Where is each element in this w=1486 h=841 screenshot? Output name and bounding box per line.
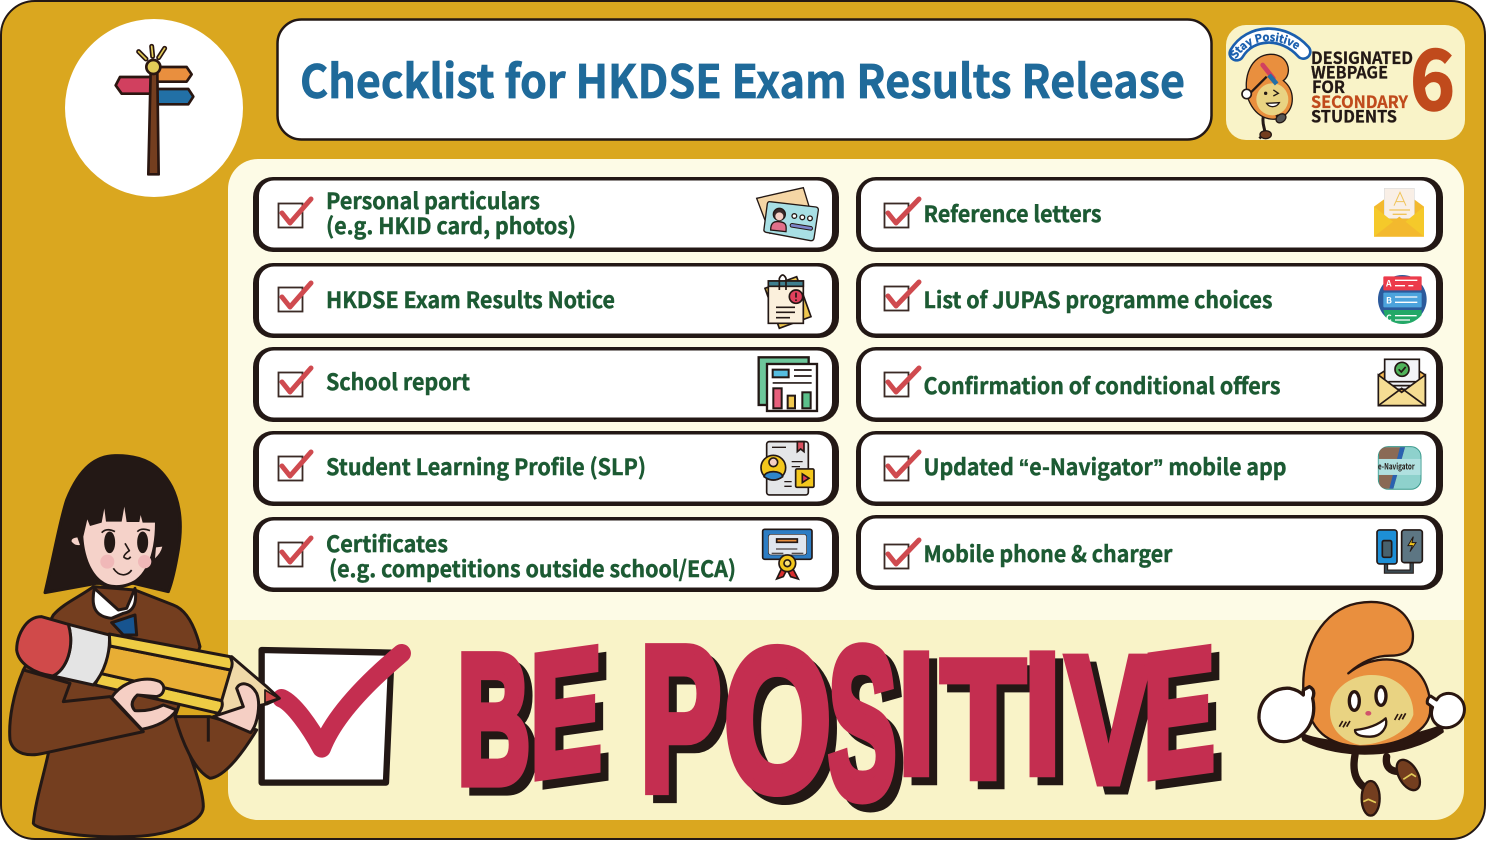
left glove xyxy=(1259,687,1314,742)
icon: ABC programme choices xyxy=(1378,275,1427,324)
girl with giant pencil xyxy=(10,456,279,837)
jacket body xyxy=(23,587,203,837)
logo text: DESIGNATED xyxy=(1311,45,1413,69)
slogan: BE POSITIVE: E xyxy=(530,610,602,815)
logo text: FOR xyxy=(1312,74,1345,98)
slogan: BE POSITIVE: V xyxy=(1066,620,1151,821)
head xyxy=(1303,602,1430,747)
eyes xyxy=(102,529,150,553)
slogan: BE POSITIVE: T xyxy=(941,625,1025,813)
panel: checklist background xyxy=(228,159,1464,820)
hands xyxy=(112,679,177,729)
slogan: BE POSITIVE xyxy=(457,603,1215,841)
panel: checklist right column xyxy=(856,177,1443,590)
blush marks xyxy=(1339,713,1406,727)
item: e-Navigator app: Updated “e-Navigator” mobile app xyxy=(924,450,1286,482)
item: e-Navigator app xyxy=(856,431,1443,506)
item: results notice xyxy=(253,263,839,338)
title: Checklist for HKDSE Exam Results Release xyxy=(300,46,1185,112)
slogan: BE POSITIVE: B xyxy=(457,616,531,823)
panel: checklist left column xyxy=(253,177,839,592)
logo text: WEBPAGE xyxy=(1311,60,1388,84)
legs xyxy=(1354,755,1400,790)
item: mobile phone and charger: Mobile phone & charger xyxy=(924,537,1173,569)
icon: offer envelope xyxy=(1378,359,1425,406)
icon: school report xyxy=(759,357,817,411)
shoes xyxy=(1362,781,1380,816)
icon: e-Navigator app xyxy=(1378,447,1421,489)
slogan: BE POSITIVE: S xyxy=(828,603,897,841)
icon: signpost in circle xyxy=(65,19,243,197)
slogan: BE POSITIVE: I xyxy=(898,618,935,810)
title xyxy=(278,20,1212,140)
item: reference letters: Reference letters xyxy=(924,197,1102,229)
icon: ABC programme choices: C xyxy=(1386,312,1392,324)
item: student learning profile: Student Learning Profile (SLP) xyxy=(326,450,646,482)
item: personal particulars: (e.g. HKID card, photos) xyxy=(326,209,576,241)
shirt collar xyxy=(93,588,136,618)
slogan: BE POSITIVE: E xyxy=(1143,610,1215,815)
icon: reference letter envelope xyxy=(1374,188,1424,237)
icon: ABC programme choices: A xyxy=(1385,278,1392,290)
logo text xyxy=(1311,45,1413,128)
logo number 6: 6 xyxy=(1410,14,1455,135)
eyes xyxy=(1349,692,1359,710)
icon: e-Navigator app: e-Navigator xyxy=(1378,461,1415,473)
icon: ABC programme choices: B xyxy=(1386,294,1392,306)
nose xyxy=(1365,711,1371,716)
nose and smile xyxy=(113,543,132,575)
item: personal particulars: Personal particulars xyxy=(326,184,540,216)
icon: small mascot xyxy=(1242,54,1292,139)
large check box xyxy=(262,650,402,783)
mouth xyxy=(1355,718,1386,737)
item: conditional offers: Confirmation of conditional offers xyxy=(924,369,1280,401)
item: JUPAS choices: List of JUPAS programme choices xyxy=(924,283,1272,315)
logo text: SECONDARY xyxy=(1311,89,1408,113)
item: personal particulars xyxy=(253,177,839,252)
icon: certificate xyxy=(763,529,812,579)
item: school report xyxy=(253,347,839,422)
item: certificates: Certificates xyxy=(326,527,448,559)
item: certificates: (e.g. competitions outside school/ECA) xyxy=(329,552,736,584)
arms and base xyxy=(1302,726,1443,754)
item: school report: School report xyxy=(326,365,470,397)
stay positive badge: Stay Positive xyxy=(1231,32,1300,58)
tie xyxy=(112,615,137,635)
logo text: STUDENTS xyxy=(1311,104,1397,128)
face xyxy=(1330,675,1413,745)
icon: notice with paper clip xyxy=(765,275,811,328)
item: conditional offers xyxy=(856,347,1443,422)
item: mobile phone and charger xyxy=(856,515,1443,590)
icon: ID card xyxy=(757,188,818,241)
hair xyxy=(45,456,180,593)
pencil xyxy=(17,617,279,715)
slogan: BE POSITIVE: O xyxy=(724,607,831,833)
item: JUPAS choices xyxy=(856,263,1443,338)
icon: phone and power bank xyxy=(1377,530,1422,572)
item: reference letters xyxy=(856,177,1443,252)
right glove xyxy=(1427,693,1464,728)
icon: student learning profile xyxy=(761,442,814,495)
panel: designated webpage logo xyxy=(1226,14,1465,140)
cheeks xyxy=(100,555,151,569)
slogan: BE POSITIVE: P xyxy=(640,604,721,834)
jacket left arm xyxy=(10,670,143,755)
jacket right sleeve xyxy=(175,717,257,778)
item: certificates xyxy=(253,517,839,592)
item: student learning profile xyxy=(253,431,839,506)
slogan: BE POSITIVE: I xyxy=(1024,618,1061,810)
ears xyxy=(72,537,162,558)
face xyxy=(83,507,155,586)
item: results notice: HKDSE Exam Results Notice xyxy=(326,283,615,315)
mascot: orange six character xyxy=(1259,602,1464,816)
